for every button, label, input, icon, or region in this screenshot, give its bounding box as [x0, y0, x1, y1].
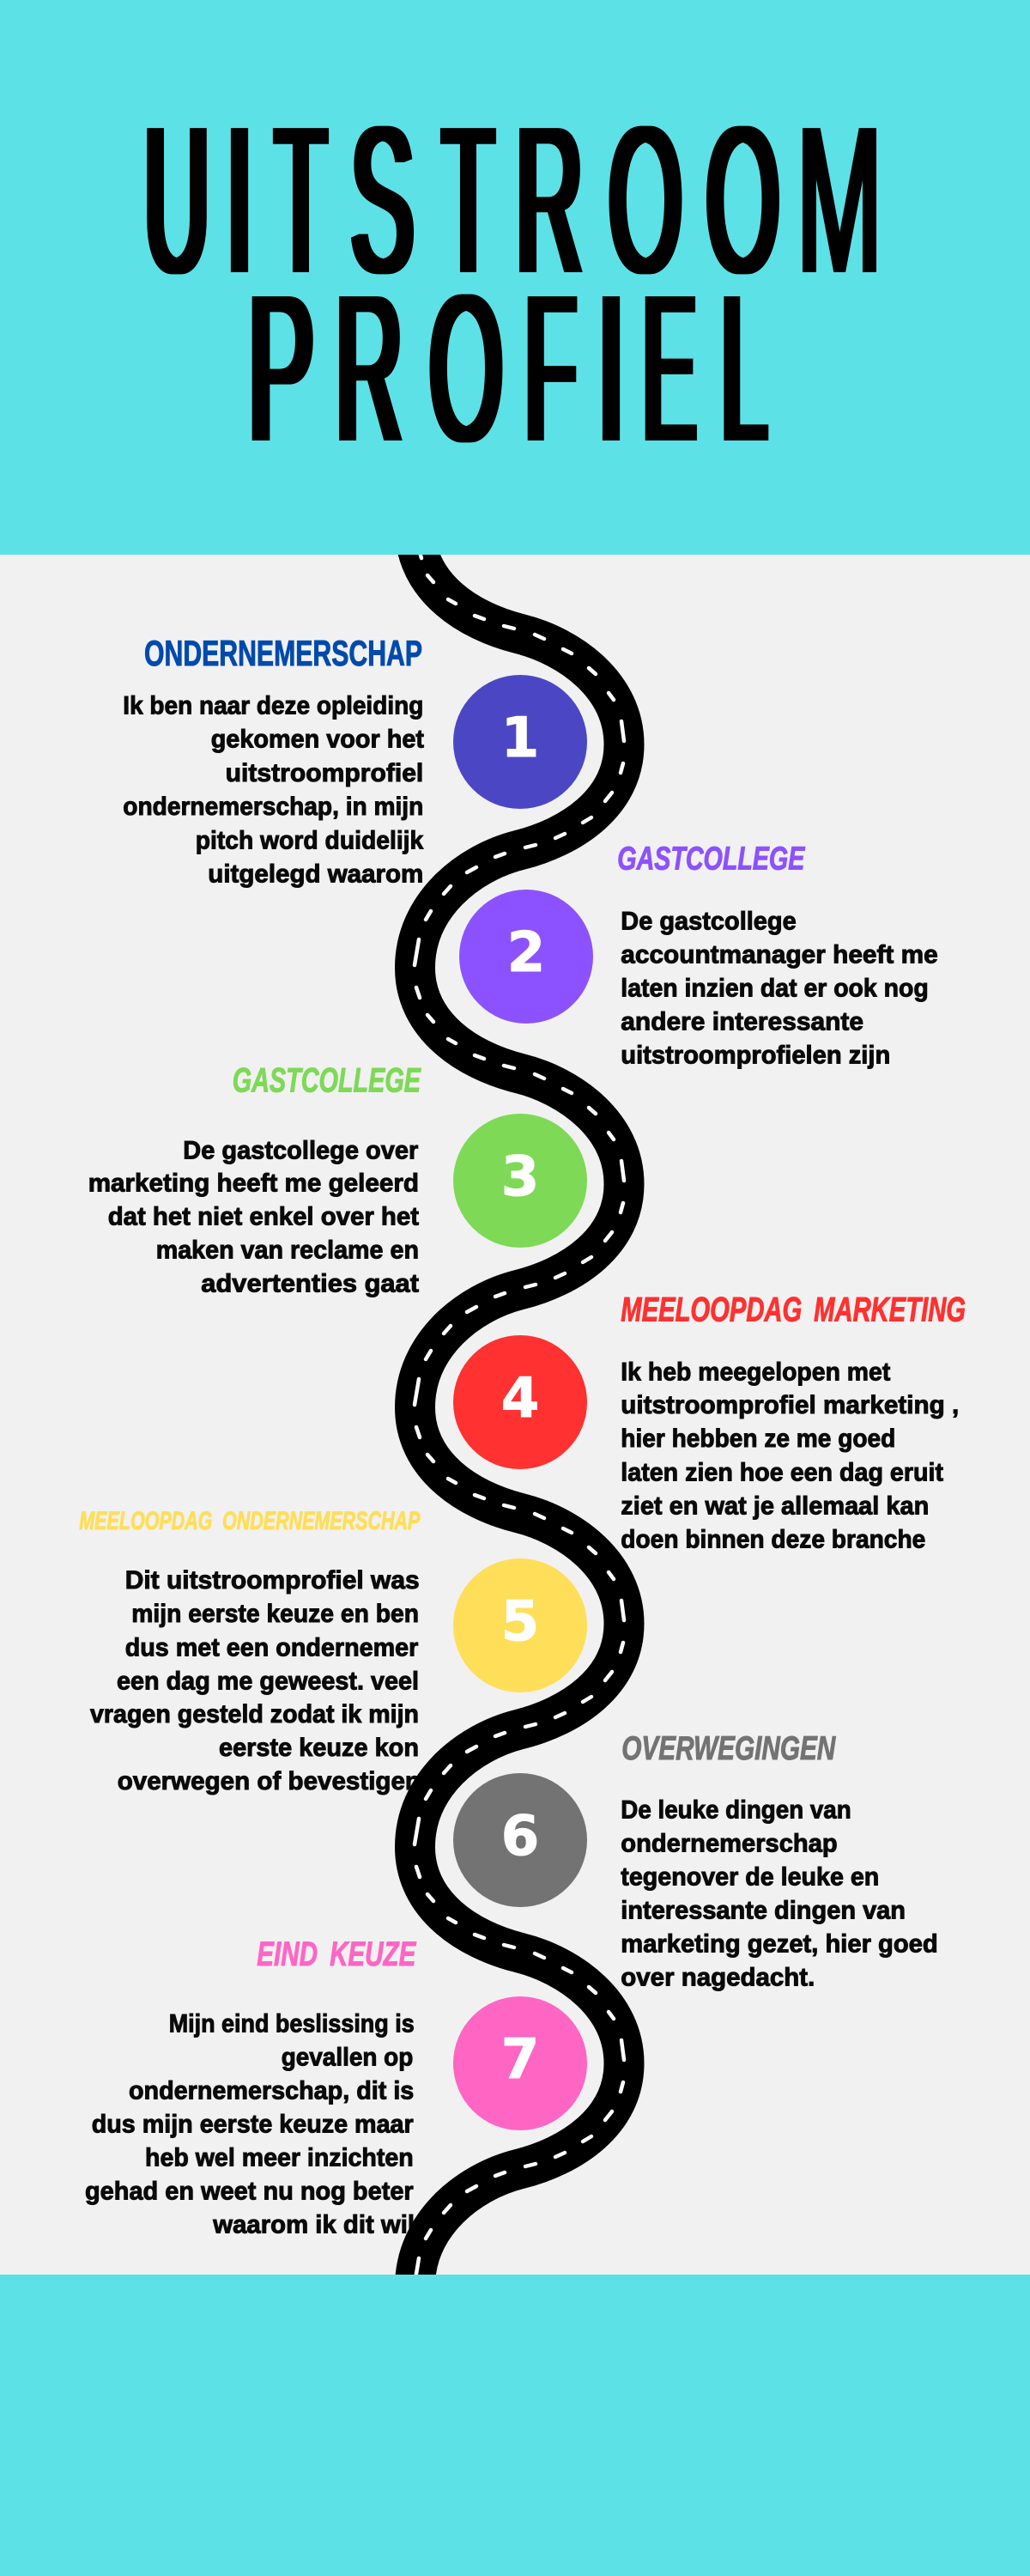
step 5 circle [453, 1558, 587, 1692]
body text: step 3: marketing heeft me geleerd [88, 1170, 419, 1198]
title: U [144, 82, 209, 317]
body text: step 4: Ik heb meegelopen met [621, 1358, 890, 1386]
body text: step 4: doen binnen deze branche [621, 1525, 925, 1553]
body text: step 6: tegenover de leuke en [621, 1863, 879, 1892]
body text: step 4: uitstroomprofiel marketing , [621, 1391, 959, 1419]
heading: meeloopdag ondernemerschap: MEELOOPDAG ONDERNEMERSCHAP [79, 1507, 421, 1535]
title: O [429, 252, 503, 486]
body text: step 4 [621, 1358, 959, 1553]
step 6 circle: 6 [501, 1805, 539, 1868]
step 3 circle: 3 [501, 1145, 539, 1209]
body text: step 2 [621, 908, 938, 1070]
heading: gastcollege: GASTCOLLEGE [617, 841, 806, 878]
title: E [643, 252, 696, 486]
panel: step 5 text [79, 1507, 421, 1795]
body text: step 5: mijn eerste keuze en ben [131, 1600, 419, 1628]
body text: step 7: dus mijn eerste keuze maar [92, 2110, 414, 2138]
footer band [0, 2275, 1030, 2576]
title [144, 82, 882, 486]
heading: ondernemerschap: ONDERNEMERSCHAP [144, 633, 422, 673]
body text: step 4: laten zien hoe een dag eruit [621, 1458, 943, 1486]
body text: step 1: Ik ben naar deze opleiding [123, 692, 423, 720]
title: O [706, 84, 779, 318]
step 6 circle [453, 1773, 587, 1907]
step 2 circle: 2 [507, 921, 545, 985]
road dash: top stub [419, 550, 421, 558]
body text: step 6: over nagedacht. [621, 1963, 815, 1991]
body text: step 3: advertenties gaat [201, 1269, 419, 1297]
body text: step 7: ondernemerschap, dit is [129, 2076, 414, 2105]
body text: step 5: een dag me geweest. veel [117, 1667, 419, 1695]
body text: step 3: De gastcollege over [183, 1136, 419, 1164]
step 3 circle [453, 1114, 587, 1248]
body text: step 1 [123, 692, 424, 888]
body text: step 2: andere interessante [621, 1007, 863, 1036]
body text: step 2: uitstroomprofielen zijn [621, 1042, 890, 1070]
step 2 circle [459, 890, 593, 1024]
body text: step 2: accountmanager heeft me [621, 941, 938, 969]
body text: step 6 [621, 1795, 938, 1991]
panel: step 1 text [123, 633, 424, 888]
heading: overwegingen: OVERWEGINGEN [621, 1730, 836, 1767]
body text: step 3: maken van reclame en [156, 1236, 419, 1265]
background panel [0, 555, 1030, 2275]
title: R [516, 82, 583, 317]
title: I [598, 252, 624, 486]
title: L [722, 252, 766, 486]
panel: step 3 text [88, 1062, 421, 1297]
body text: step 1: ondernemerschap, in mijn [123, 793, 423, 821]
body text: step 5: dus met een ondernemer [125, 1633, 419, 1662]
title: T [443, 84, 494, 318]
title: M [797, 82, 882, 317]
body text: step 1: uitstroomprofiel [226, 759, 423, 787]
title: S [351, 84, 414, 318]
body text: step 3: dat het niet enkel over het [108, 1203, 419, 1231]
title: P [248, 252, 314, 485]
body text: step 5: Dit uitstroomprofiel was [125, 1566, 420, 1595]
step 5 circle: 5 [501, 1590, 539, 1654]
body text: step 7 [85, 2010, 415, 2239]
body text: step 1: pitch word duidelijk [196, 826, 424, 854]
body text: step 2: laten inzien dat er ook nog [621, 975, 929, 1003]
heading: eind keuze: EIND KEUZE [257, 1935, 416, 1973]
body text: step 6: De leuke dingen van [621, 1795, 851, 1824]
panel: step 7 text [85, 1935, 416, 2239]
body text: step 6: interessante dingen van [621, 1896, 906, 1924]
body text: step 4: hier hebben ze me goed [621, 1425, 895, 1453]
step 4 circle [453, 1335, 587, 1469]
body text: step 7: waarom ik dit wil [212, 2211, 415, 2239]
panel: step 2 text [617, 841, 938, 1070]
body text: step 5: overwegen of bevestigen [118, 1767, 421, 1795]
step 4 circle: 4 [501, 1367, 539, 1431]
body text: step 7: heb wel meer inzichten [145, 2144, 414, 2172]
step 1 circle: 1 [501, 707, 539, 770]
body text: step 7: Mijn eind beslissing is [169, 2010, 415, 2038]
title: T [276, 84, 326, 318]
body text: step 7: gehad en weet nu nog beter [85, 2178, 414, 2206]
title: F [525, 252, 576, 486]
step 1 circle [453, 675, 587, 809]
body text: step 7: gevallen op [282, 2044, 413, 2072]
body text: step 2: De gastcollege [621, 908, 797, 936]
step 7 circle [453, 1996, 587, 2130]
panel: step 4 text [621, 1291, 966, 1553]
body text: step 5 [90, 1566, 421, 1795]
panel: step 6 text [621, 1730, 938, 1991]
body text: step 1: gekomen voor het [211, 726, 424, 754]
body text: step 1: uitgelegd waarom [208, 860, 423, 888]
title: I [227, 84, 252, 318]
body text: step 3 [88, 1136, 419, 1297]
title: R [336, 251, 403, 485]
body text: step 5: eerste keuze kon [219, 1734, 419, 1762]
header band [0, 0, 1030, 555]
winding road [415, 515, 624, 2317]
body text: step 6: ondernemerschap [621, 1830, 838, 1858]
heading: gastcollege: GASTCOLLEGE [233, 1062, 421, 1100]
step 7 circle: 7 [501, 2028, 539, 2092]
body text: step 4: ziet en wat je allemaal kan [621, 1492, 929, 1520]
title: O [609, 84, 682, 318]
body text: step 5: vragen gesteld zodat ik mijn [90, 1700, 419, 1728]
body text: step 6: marketing gezet, hier goed [621, 1929, 938, 1958]
